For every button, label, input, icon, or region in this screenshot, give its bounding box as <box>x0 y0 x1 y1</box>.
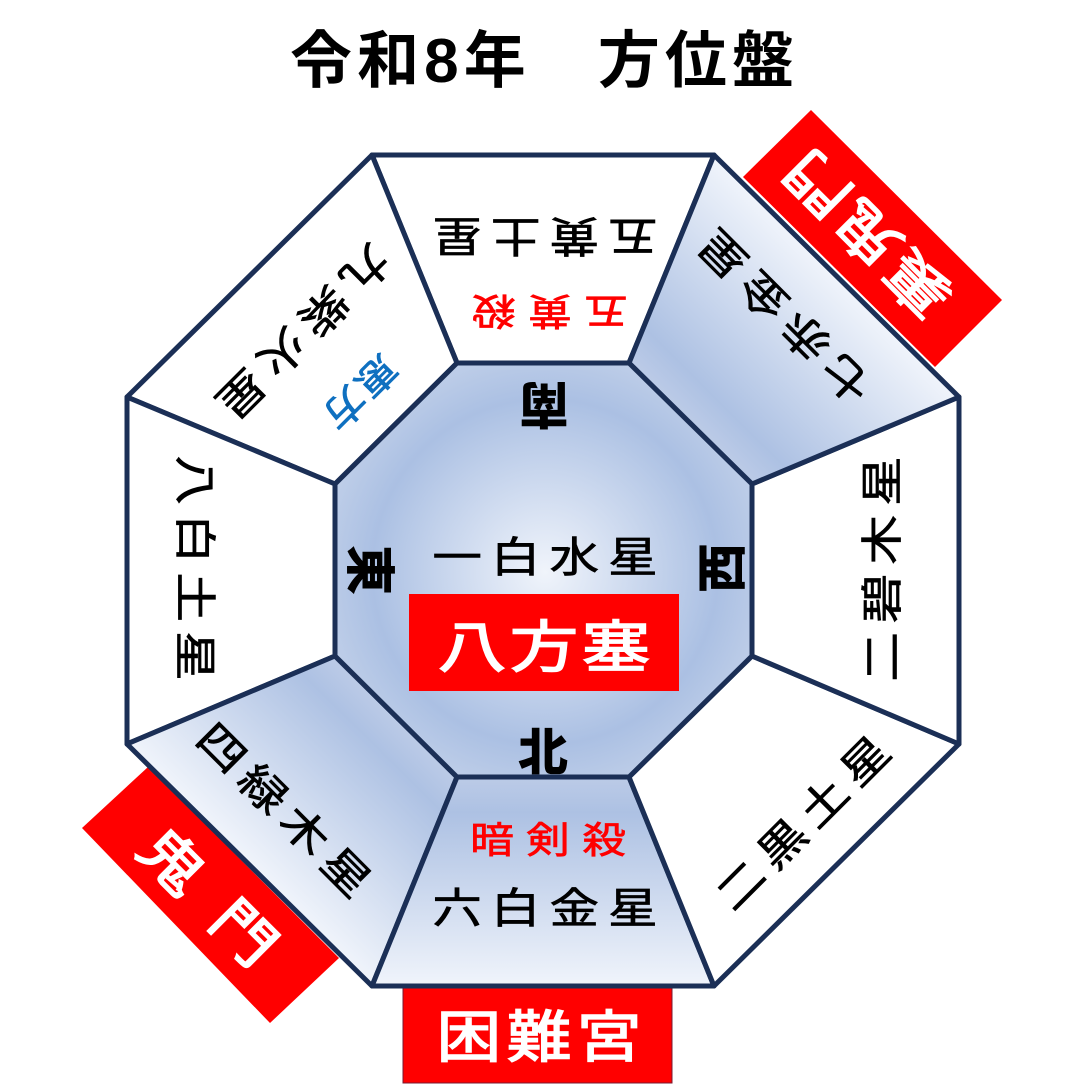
label: 困難宮 <box>403 988 672 1083</box>
label: 八方塞 <box>409 594 679 691</box>
segment: northeast <box>127 656 457 986</box>
segment: east <box>127 397 335 744</box>
direction: 南: 南 <box>519 376 569 432</box>
segment: northwest <box>629 656 959 986</box>
star: 五黄土星: 五黄土星 <box>432 212 658 259</box>
star: 八白土星: 八白土星 <box>171 455 218 681</box>
label: 裏鬼門: 裏鬼門 <box>773 138 964 329</box>
segment: west <box>752 397 959 744</box>
direction: 北: 北 <box>518 725 568 781</box>
segment: south <box>372 155 714 363</box>
star: 一白水星: 一白水星 <box>432 534 658 581</box>
star: 九紫火星: 九紫火星 <box>206 235 399 428</box>
direction: 西: 西 <box>695 543 751 593</box>
segment: north <box>372 777 714 986</box>
star: 七赤金星: 七赤金星 <box>689 219 882 412</box>
segment: southwest <box>127 155 457 484</box>
lucky direction: 恵方: 恵方 <box>314 346 405 437</box>
star: 二黒土星: 二黒土星 <box>707 727 900 920</box>
label: 鬼門 <box>82 767 339 1023</box>
center octagon <box>335 363 752 777</box>
label: 八方塞: 八方塞 <box>438 617 650 680</box>
star: 六白金星: 六白金星 <box>432 885 658 932</box>
star: 二碧木星: 二碧木星 <box>859 456 906 682</box>
warning: 暗剣殺: 暗剣殺 <box>470 819 626 861</box>
title: 令和8年 方位盤 <box>290 27 796 96</box>
segment: southeast <box>629 155 959 484</box>
warning: 五黄殺: 五黄殺 <box>472 290 628 332</box>
star: 四緑木星: 四緑木星 <box>187 714 380 907</box>
label: 裏鬼門 <box>743 110 1002 367</box>
label: 困難宮: 困難宮 <box>437 1006 641 1069</box>
label: 鬼門: 鬼 門 <box>126 816 289 979</box>
direction: 東: 東 <box>341 545 397 595</box>
